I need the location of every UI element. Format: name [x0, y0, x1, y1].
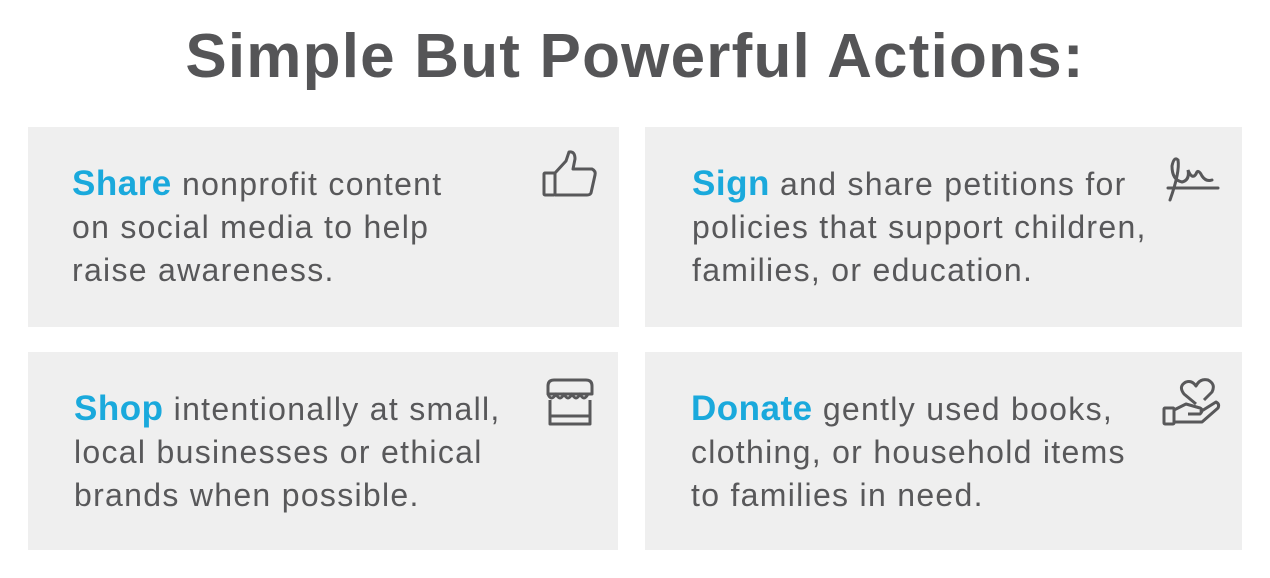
icon: storefront	[546, 378, 594, 426]
text: shop: Shop intentionally at small,	[74, 389, 501, 428]
icon: hand with heart	[1162, 378, 1220, 426]
text: share: on social media to help	[72, 209, 429, 245]
panel: share	[28, 127, 619, 327]
text: donate: clothing, or household items	[691, 434, 1126, 470]
text: sign	[692, 164, 1147, 288]
text: share	[72, 164, 442, 288]
text: donate	[691, 389, 1126, 513]
icon: signature	[1166, 157, 1220, 202]
text: share: raise awareness.	[72, 252, 335, 288]
text: donate: to families in need.	[691, 477, 984, 513]
text: donate: Donate gently used books,	[691, 389, 1113, 428]
text: share: Share nonprofit content	[72, 164, 442, 203]
text: shop: brands when possible.	[74, 477, 420, 513]
icon: thumbs up	[542, 150, 597, 196]
panel: donate	[645, 352, 1242, 550]
panel: sign	[645, 127, 1242, 327]
text: sign: families, or education.	[692, 252, 1033, 288]
panel: shop	[28, 352, 618, 550]
text: sign: policies that support children,	[692, 209, 1147, 245]
text: shop	[74, 389, 501, 513]
title: Simple But Powerful Actions:	[185, 22, 1085, 91]
text: shop: local businesses or ethical	[74, 434, 483, 470]
text: sign: Sign and share petitions for	[692, 164, 1127, 203]
